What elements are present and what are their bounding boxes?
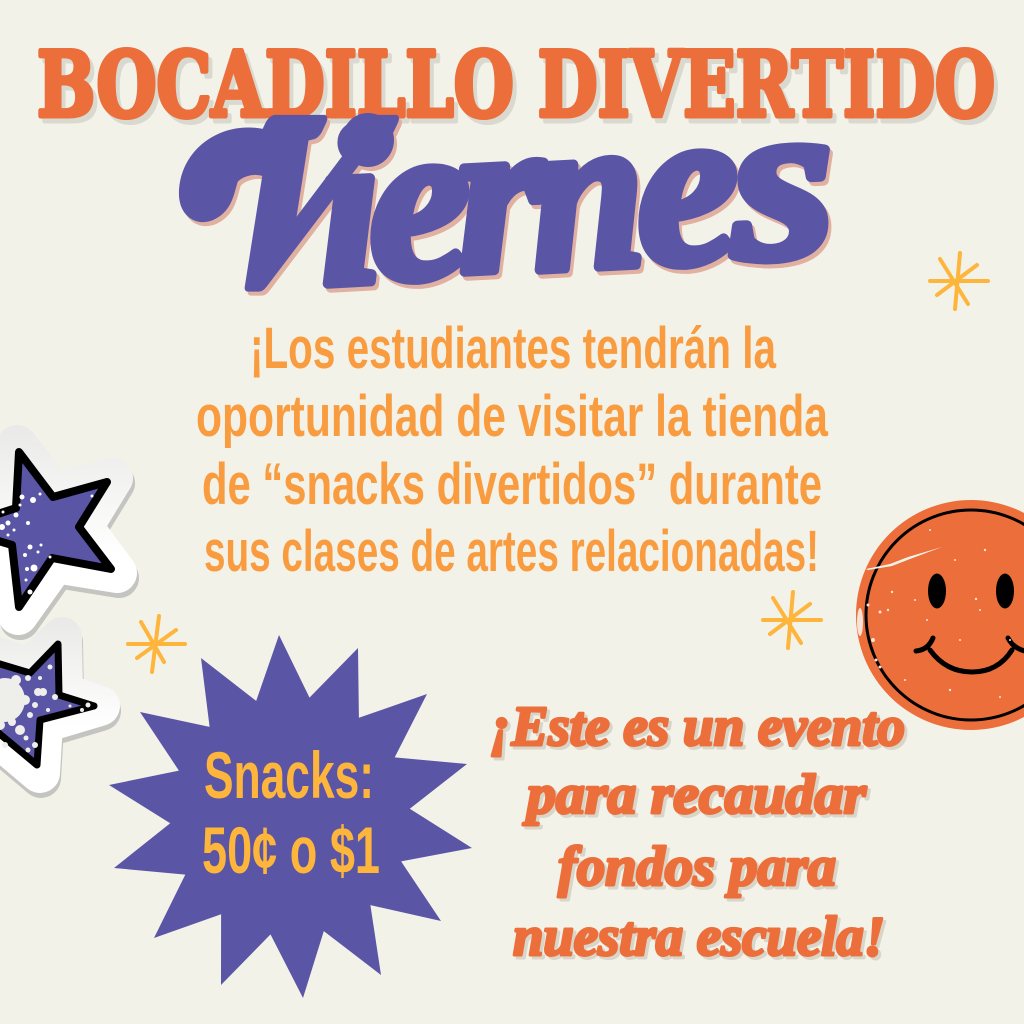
icon: sparkle left [128,616,185,672]
text block: fundraiser message: para recaudar [523,764,867,826]
icon: starburst badge with price: Snacks: [204,738,374,812]
text block: fundraiser message: fondos para [558,836,836,898]
text block: fundraiser message: ¡Este es un evento [490,696,905,758]
text block: event description [196,316,829,584]
text block: event description: ¡Los estudiantes tendrán la [250,316,777,381]
icon: sparkle top right [930,253,988,309]
heading: Viernes script lettering: i [311,80,387,333]
icon: starburst badge with price: 50¢ o $1 [202,813,380,887]
icon: sparkle middle [763,592,821,648]
text block: fundraiser message: nuestra escuela! [513,906,885,968]
icon: starburst badge with price [109,635,472,998]
icon: smiley face [856,500,1024,730]
heading: Viernes script lettering: s [722,49,840,309]
heading: Viernes script lettering: V [171,67,420,333]
heading: Viernes script lettering: n [525,65,650,319]
heading: Viernes script lettering [171,49,840,333]
heading: Viernes script lettering: e [361,70,477,330]
heading: Viernes script lettering: r [449,67,552,321]
text block: fundraiser message [490,696,905,968]
icon: star sticker lower [0,637,101,778]
heading: Viernes script lettering: e [629,55,745,315]
icon: star sticker upper [0,445,119,620]
